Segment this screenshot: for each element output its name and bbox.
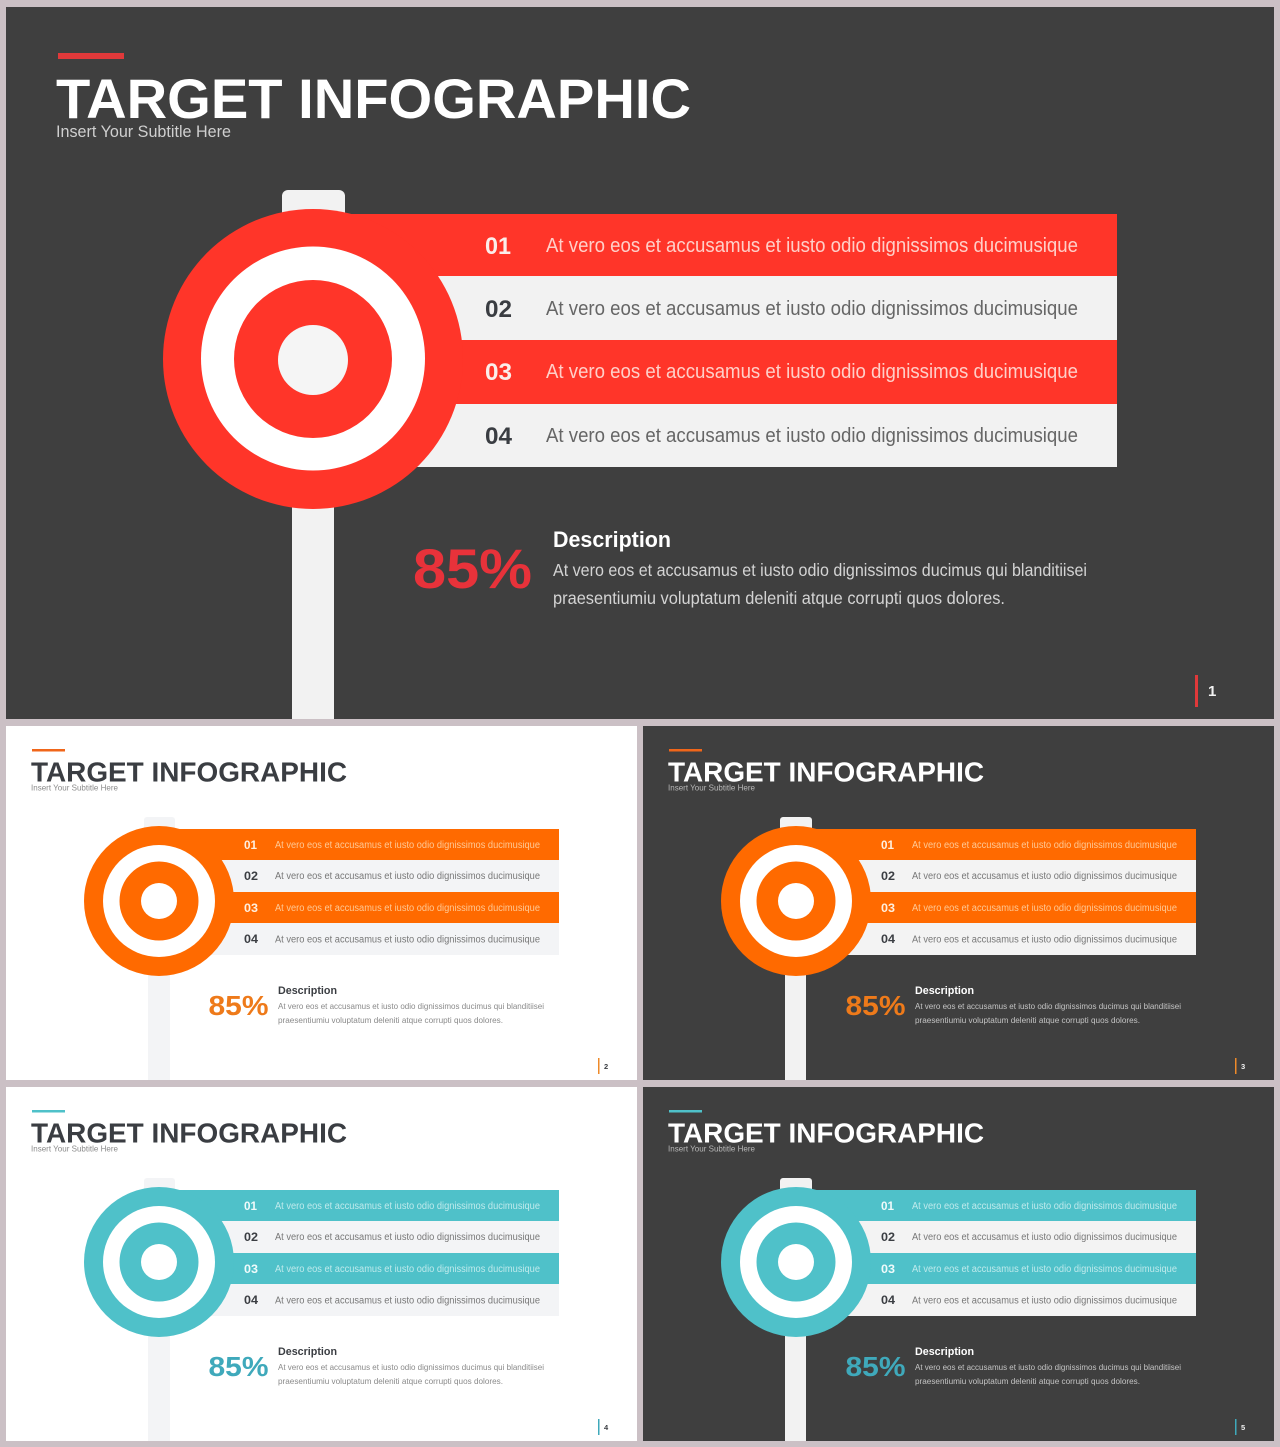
- row 04: 04: [244, 932, 258, 946]
- description: At vero eos et accusamus et iusto odio dignissimos ducimus qui blanditiisei: [278, 1362, 544, 1372]
- page number: [1235, 1419, 1245, 1435]
- row 01: 01: [244, 838, 257, 852]
- panel: slide 3, orange on dark: [643, 726, 1274, 1080]
- row 04: At vero eos et accusamus et iusto odio dignissimos ducimusique: [912, 1296, 1177, 1306]
- row 01: 01: [881, 1199, 894, 1213]
- row 02: At vero eos et accusamus et iusto odio dignissimos ducimusique: [546, 298, 1078, 320]
- row 01: [244, 1199, 540, 1213]
- signpost: [780, 817, 812, 1080]
- description: praesentiumiu voluptatum deleniti atque corrupti quos dolores.: [278, 1015, 503, 1025]
- page number: 1: [1208, 683, 1216, 700]
- rows list: [165, 1190, 559, 1316]
- row 03: [881, 1262, 1177, 1276]
- row 02: [485, 296, 1078, 323]
- row 02: 02: [244, 869, 258, 883]
- row 03: [244, 1262, 540, 1276]
- signpost: [144, 817, 175, 1080]
- subtitle: Insert Your Subtitle Here: [668, 1144, 755, 1154]
- row 02: At vero eos et accusamus et iusto odio dignissimos ducimusique: [275, 1232, 540, 1243]
- row 02: [881, 1230, 1177, 1244]
- row 04: [244, 1293, 540, 1307]
- row 04: At vero eos et accusamus et iusto odio dignissimos ducimusique: [275, 934, 540, 946]
- description: At vero eos et accusamus et iusto odio dignissimos ducimus qui blanditiisei: [278, 1001, 544, 1011]
- description: Description: [915, 985, 974, 997]
- row 02: 02: [485, 296, 512, 323]
- stat: 85%: 85%: [846, 990, 906, 1021]
- description: [278, 1346, 544, 1386]
- description: Description: [915, 1346, 974, 1358]
- stat: 85%: 85%: [208, 1351, 269, 1382]
- row 01: [881, 1199, 1177, 1213]
- description: praesentiumiu voluptatum deleniti atque corrupti quos dolores.: [278, 1376, 503, 1386]
- row 03: At vero eos et accusamus et iusto odio dignissimos ducimusique: [275, 903, 540, 914]
- icon: target: [721, 826, 871, 976]
- page number: [598, 1419, 609, 1435]
- row 02: 02: [881, 1230, 895, 1244]
- row 04: 04: [244, 1293, 258, 1307]
- description: [915, 985, 1181, 1025]
- row 01: 01: [881, 838, 894, 852]
- accent bar: [669, 1110, 702, 1112]
- page number: 4: [604, 1423, 609, 1432]
- page number: 2: [604, 1062, 608, 1071]
- row 01: At vero eos et accusamus et iusto odio dignissimos ducimusique: [546, 235, 1078, 257]
- page number: [1235, 1058, 1245, 1074]
- description: At vero eos et accusamus et iusto odio dignissimos ducimus qui blanditiisei: [553, 560, 1087, 580]
- row 02: 02: [881, 869, 895, 883]
- description: [278, 985, 544, 1025]
- stat: 85%: 85%: [846, 1351, 906, 1382]
- accent bar: [32, 749, 65, 752]
- description: At vero eos et accusamus et iusto odio dignissimos ducimus qui blanditiisei: [915, 1001, 1181, 1011]
- row 04: [881, 1293, 1177, 1307]
- row 01: At vero eos et accusamus et iusto odio dignissimos ducimusique: [912, 840, 1177, 851]
- row 04: 04: [881, 932, 895, 946]
- page number: [598, 1058, 608, 1074]
- icon: target: [84, 1187, 234, 1337]
- row 01: At vero eos et accusamus et iusto odio dignissimos ducimusique: [275, 840, 540, 851]
- signpost: [282, 190, 345, 719]
- row 04: At vero eos et accusamus et iusto odio dignissimos ducimusique: [912, 934, 1177, 946]
- row 03: 03: [881, 901, 895, 915]
- title: TARGET INFOGRAPHIC: [668, 756, 984, 788]
- row 04: At vero eos et accusamus et iusto odio dignissimos ducimusique: [275, 1296, 540, 1306]
- row 03: At vero eos et accusamus et iusto odio dignissimos ducimusique: [275, 1264, 540, 1275]
- row 01: [881, 838, 1177, 852]
- row 01: [485, 233, 1078, 260]
- panel: slide 4, teal on white: [6, 1087, 637, 1441]
- accent bar: [58, 53, 124, 59]
- icon: target: [84, 826, 234, 976]
- description: praesentiumiu voluptatum deleniti atque corrupti quos dolores.: [915, 1376, 1140, 1386]
- description: praesentiumiu voluptatum deleniti atque corrupti quos dolores.: [553, 588, 1005, 608]
- row 03: At vero eos et accusamus et iusto odio dignissimos ducimusique: [912, 1264, 1177, 1275]
- rows list: [320, 214, 1117, 467]
- page number: 3: [1241, 1062, 1245, 1071]
- stat: 85%: 85%: [208, 990, 269, 1021]
- row 03: 03: [881, 1262, 895, 1276]
- panel: main slide, red on dark: [6, 7, 1274, 719]
- row 04: [881, 932, 1177, 946]
- row 02: [881, 869, 1177, 883]
- row 01: At vero eos et accusamus et iusto odio dignissimos ducimusique: [912, 1201, 1177, 1212]
- panel: slide 2, orange on white: [6, 726, 637, 1080]
- panel: slide 5, teal on dark: [643, 1087, 1274, 1441]
- row 02: At vero eos et accusamus et iusto odio dignissimos ducimusique: [912, 871, 1177, 882]
- rows list: [802, 1190, 1196, 1316]
- signpost: [144, 1178, 175, 1441]
- description: praesentiumiu voluptatum deleniti atque corrupti quos dolores.: [915, 1015, 1140, 1025]
- row 03: [485, 359, 1078, 386]
- row 02: 02: [244, 1230, 258, 1244]
- subtitle: Insert Your Subtitle Here: [56, 122, 231, 141]
- description: Description: [553, 527, 671, 552]
- row 02: [244, 869, 540, 883]
- subtitle: Insert Your Subtitle Here: [668, 782, 755, 792]
- row 04: At vero eos et accusamus et iusto odio dignissimos ducimusique: [546, 425, 1078, 447]
- row 03: [881, 901, 1177, 915]
- accent bar: [32, 1110, 65, 1112]
- title: TARGET INFOGRAPHIC: [31, 1118, 347, 1148]
- row 01: [244, 838, 540, 852]
- description: Description: [278, 1346, 337, 1358]
- row 02: [244, 1230, 540, 1244]
- row 03: [244, 901, 540, 915]
- signpost: [780, 1178, 812, 1441]
- accent bar: [669, 749, 702, 752]
- row 03: 03: [244, 901, 258, 915]
- page number: 5: [1241, 1423, 1245, 1432]
- title: TARGET INFOGRAPHIC: [31, 756, 347, 788]
- row 03: At vero eos et accusamus et iusto odio dignissimos ducimusique: [546, 361, 1078, 383]
- page number: [1195, 675, 1216, 707]
- rows list: [802, 829, 1196, 955]
- row 01: At vero eos et accusamus et iusto odio dignissimos ducimusique: [275, 1201, 540, 1212]
- stat: 85%: 85%: [413, 537, 532, 600]
- row 04: 04: [881, 1293, 895, 1307]
- subtitle: Insert Your Subtitle Here: [31, 1144, 118, 1154]
- description: Description: [278, 985, 337, 997]
- row 03: At vero eos et accusamus et iusto odio dignissimos ducimusique: [912, 903, 1177, 914]
- row 04: [485, 423, 1078, 450]
- row 03: 03: [485, 359, 512, 386]
- row 03: 03: [244, 1262, 258, 1276]
- row 02: At vero eos et accusamus et iusto odio dignissimos ducimusique: [912, 1232, 1177, 1243]
- row 01: 01: [485, 233, 511, 260]
- row 02: At vero eos et accusamus et iusto odio dignissimos ducimusique: [275, 871, 540, 882]
- subtitle: Insert Your Subtitle Here: [31, 782, 118, 792]
- icon: target: [721, 1187, 871, 1337]
- icon: target: [163, 209, 463, 509]
- description: At vero eos et accusamus et iusto odio dignissimos ducimus qui blanditiisei: [915, 1362, 1181, 1372]
- rows list: [165, 829, 559, 955]
- row 04: 04: [485, 423, 513, 450]
- description: [553, 527, 1087, 608]
- row 01: 01: [244, 1199, 257, 1213]
- title: TARGET INFOGRAPHIC: [668, 1118, 984, 1148]
- description: [915, 1346, 1181, 1386]
- row 04: [244, 932, 540, 946]
- title: TARGET INFOGRAPHIC: [56, 67, 691, 130]
